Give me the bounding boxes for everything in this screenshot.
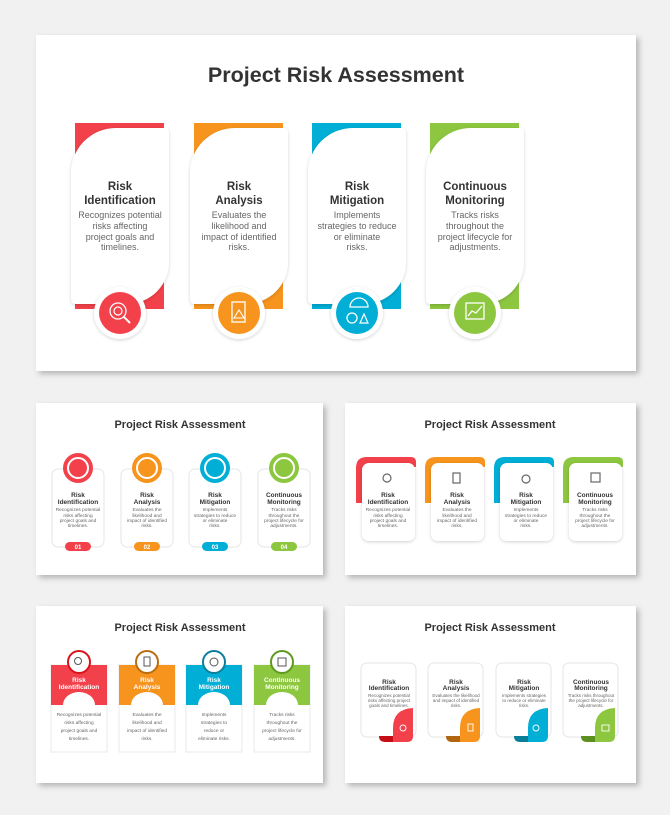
panel: slide variant 2: throughout the: [580, 513, 611, 519]
panel: slide variant 1: 01: [75, 545, 82, 551]
panel: slide variant 2: risks affecting: [373, 513, 403, 519]
panel: slide variant 3: Evaluates the: [132, 712, 162, 718]
panel: slide variant 3: Project Risk Assessment: [114, 622, 246, 634]
panel: slide variant 3: Analysis: [134, 684, 161, 691]
panel: slide variant 1: risks.: [209, 523, 221, 529]
panel: slide variant 1: impact of identified: [127, 518, 167, 524]
card: risk identification: Risk: [108, 181, 133, 193]
panel: slide variant 1: Risk: [71, 492, 85, 499]
panel: slide variant 2: Analysis: [444, 499, 471, 506]
panel: slide variant 4: Project Risk Assessment: [424, 622, 556, 634]
panel: slide variant 2: Risk: [381, 492, 395, 499]
panel: slide variant 2: adjustments.: [581, 523, 609, 529]
panel: slide variant 1: 03: [212, 545, 219, 551]
panel: slide variant 3: Mitigation: [199, 684, 229, 691]
panel: slide variant 2: Risk: [450, 492, 464, 499]
card: risk analysis: Evaluates the: [212, 210, 266, 220]
panel: slide variant 4: Identification: [369, 685, 409, 692]
panel: slide variant 1: or eliminate: [203, 518, 228, 524]
panel: slide variant 3: risks affecting: [64, 720, 94, 726]
panel: slide variant 1: Analysis: [134, 499, 161, 506]
card: risk mitigation: [308, 123, 406, 339]
panel: slide variant 3: Identification: [59, 684, 99, 691]
card: risk analysis: risks.: [228, 242, 250, 252]
panel: slide variant 1: Tracks risks: [271, 507, 297, 513]
panel: slide variant 1: timelines.: [68, 523, 88, 529]
panel: slide variant 2: Identification: [368, 499, 408, 506]
panel: slide variant 4: Recognizes potential: [368, 693, 410, 698]
panel: slide variant 1: Evaluates the: [132, 507, 162, 513]
panel: slide variant 3: likelihood and: [132, 720, 162, 726]
card: continuous monitoring: Continuous: [443, 181, 507, 193]
panel: slide variant 1: Mitigation: [200, 499, 230, 506]
panel: slide variant 3: timelines.: [69, 736, 89, 742]
panel: slide variant 4: Risk: [382, 679, 396, 686]
panel: slide variant 1: risks affecting: [63, 513, 93, 519]
panel: slide variant 1: throughout the: [269, 513, 300, 519]
panel: slide variant 3: strategies to: [201, 720, 227, 726]
panel: slide variant 3: reduce or: [204, 728, 225, 734]
panel: slide variant 4: Evaluates the likelihood: [432, 693, 480, 698]
panel: slide variant 2: risks.: [520, 523, 532, 529]
panel: slide variant 2: Mitigation: [511, 499, 541, 506]
panel: slide variant 2: Tracks risks: [582, 507, 608, 513]
panel: slide variant 1: Implements: [203, 507, 228, 513]
panel: slide variant 3: Risk: [207, 677, 221, 684]
card: risk analysis: [190, 123, 288, 339]
panel: slide variant 4: Risk: [449, 679, 463, 686]
panel: slide variant 4: Continuous: [573, 679, 609, 686]
panel: slide variant 1: Continuous: [266, 492, 302, 499]
panel: slide variant 4: risks.: [451, 703, 461, 708]
card: risk identification: risks affecting: [93, 221, 147, 231]
panel: slide variant 1: project goals and: [60, 518, 97, 524]
panel: slide variant 3: Risk: [140, 677, 154, 684]
panel: slide variant 2: strategies to reduce: [505, 513, 547, 519]
card: risk mitigation: Risk: [345, 181, 370, 193]
card: risk mitigation: strategies to reduce: [317, 221, 397, 231]
panel: slide variant 2: Risk: [519, 492, 533, 499]
card: risk mitigation: or eliminate: [334, 232, 380, 242]
panel: slide variant 3: adjustments.: [268, 736, 296, 742]
panel: slide variant 4: the project lifecycle for: [569, 698, 614, 703]
card: risk identification: Recognizes potential: [78, 210, 162, 220]
card: continuous monitoring: Monitoring: [445, 195, 505, 207]
card: risk identification: timelines.: [101, 242, 139, 252]
panel: slide variant 3: [36, 606, 323, 783]
panel: slide variant 2: Recognizes potential: [366, 507, 410, 513]
panel: slide variant 4: Mitigation: [509, 685, 539, 692]
panel: slide variant 4: Risk: [517, 679, 531, 686]
panel: slide variant 3: Risk: [72, 677, 86, 684]
panel: slide variant 2: timelines.: [378, 523, 398, 529]
panel: slide variant 2: Implements: [514, 507, 539, 513]
card: continuous monitoring: Tracks risks: [451, 210, 499, 220]
panel: slide variant 1: 02: [144, 545, 151, 551]
panel: slide variant 4: [345, 606, 636, 783]
panel: slide variant 2: Project Risk Assessment: [424, 419, 556, 431]
panel: slide variant 4: Analysis: [443, 685, 470, 692]
panel: slide variant 1: risks.: [141, 523, 153, 529]
card: risk identification: [71, 123, 169, 339]
panel: slide variant 2: Continuous: [577, 492, 613, 499]
panel: slide variant 4: and impact of identified: [433, 698, 480, 703]
panel: slide variant 4: Tracks risks throughout: [568, 693, 615, 698]
panel: slide variant 3: Recognizes potential: [57, 712, 101, 718]
card: continuous monitoring: throughout the: [446, 221, 504, 231]
card: risk analysis: Analysis: [215, 195, 263, 207]
panel: slide variant 3: impact of identified: [127, 728, 167, 734]
card: risk mitigation: risks.: [346, 242, 368, 252]
panel: slide variant 4: to reduce or eliminate: [502, 698, 546, 703]
panel: slide variant 1: Risk: [140, 492, 154, 499]
card: risk analysis: impact of identified: [201, 232, 277, 242]
panel: slide variant 1: likelihood and: [132, 513, 162, 519]
panel: slide variant 1: Project Risk Assessment: [114, 419, 246, 431]
panel: slide variant 4: Implements strategies: [502, 693, 547, 698]
panel: slide variant 2: [345, 403, 636, 575]
panel: slide variant 3: Implements: [202, 712, 227, 718]
panel: slide variant 4: adjustments.: [578, 703, 604, 708]
panel: slide variant 3: Tracks risks: [269, 712, 295, 718]
panel: slide variant 3: Monitoring: [265, 684, 299, 691]
card: risk analysis: likelihood and: [211, 221, 267, 231]
panel: slide variant 1: 04: [281, 545, 288, 551]
panel: slide variant 3: throughout the: [267, 720, 298, 726]
card: risk analysis: Risk: [227, 181, 252, 193]
panel: slide variant 2: risks.: [451, 523, 463, 529]
panel: slide variant 2: project goals and: [370, 518, 407, 524]
panel: slide variant 2: impact of identified: [437, 518, 477, 524]
panel: slide variant 1: Identification: [58, 499, 98, 506]
panel: slide variant 1: adjustments.: [270, 523, 298, 529]
panel: slide variant 3: risks.: [141, 736, 153, 742]
panel: slide variant 1: project lifecycle for: [264, 518, 304, 524]
panel: slide variant 2: or eliminate: [514, 518, 539, 524]
card: continuous monitoring: project lifecycle for: [438, 232, 512, 242]
card: risk mitigation: Implements: [334, 210, 381, 220]
card: risk identification: Identification: [84, 195, 156, 207]
panel: slide variant 2: Evaluates the: [442, 507, 472, 513]
panel: slide variant 2: Monitoring: [578, 499, 612, 506]
panel: main slide: [36, 35, 636, 371]
card: risk identification: project goals and: [86, 232, 154, 242]
panel: slide variant 3: eliminate risks.: [198, 736, 230, 742]
panel: slide variant 3: Continuous: [264, 677, 300, 684]
panel: slide variant 1: Risk: [208, 492, 222, 499]
card: continuous monitoring: adjustments.: [449, 242, 501, 252]
panel: slide variant 4: risks.: [519, 703, 529, 708]
panel: slide variant 4: risks affecting project: [368, 698, 411, 703]
title: Project Risk Assessment: [208, 63, 464, 87]
panel: slide variant 4: goals and timelines.: [369, 703, 409, 708]
card: risk mitigation: Mitigation: [330, 195, 384, 207]
panel: slide variant 4: Monitoring: [574, 685, 608, 692]
panel: slide variant 1: [36, 403, 323, 575]
panel: slide variant 2: project lifecycle for: [575, 518, 615, 524]
panel: slide variant 3: project goals and: [61, 728, 98, 734]
panel: slide variant 1: Recognizes potential: [56, 507, 100, 513]
card: continuous monitoring: [426, 123, 524, 339]
panel: slide variant 2: likelihood and: [442, 513, 472, 519]
panel: slide variant 1: Monitoring: [267, 499, 301, 506]
panel: slide variant 3: project lifecycle for: [262, 728, 302, 734]
panel: slide variant 1: strategies to reduce: [194, 513, 236, 519]
